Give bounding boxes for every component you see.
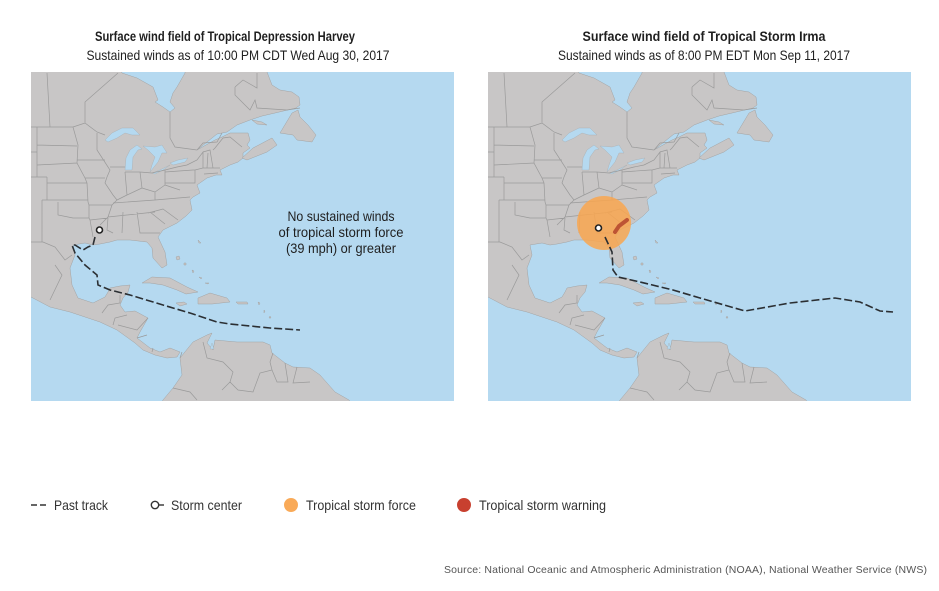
- Irma tropical storm warning: [615, 220, 627, 232]
- note: no sustained winds: [278, 208, 404, 256]
- legend: [31, 497, 606, 513]
- legend: past track: Past track: [54, 497, 109, 513]
- panel: Harvey map: [25, 60, 454, 405]
- title: Irma panel: [558, 28, 850, 63]
- icon: Irma storm center: [596, 225, 602, 231]
- title: Irma panel: Sustained winds as of 8:00 PM EDT Mon Sep 11, 2017: [558, 47, 850, 63]
- legend: tropical storm force: Tropical storm force: [306, 497, 416, 513]
- source note: Source: National Oceanic and Atmospheric Administration (NOAA), National Weather Service (NWS): [444, 564, 927, 576]
- Irma past track: [605, 237, 893, 312]
- Harvey past track: [72, 237, 300, 330]
- legend: past track: [31, 497, 109, 513]
- icon: Harvey storm center: [96, 227, 102, 233]
- legend: storm center: Storm center: [171, 497, 242, 513]
- title: Harvey panel: Surface wind field of Tropical Depression Harvey: [95, 28, 355, 44]
- title: Irma panel: Surface wind field of Tropical Storm Irma: [582, 28, 826, 44]
- title: Harvey panel: Sustained winds as of 10:00 PM CDT Wed Aug 30, 2017: [86, 47, 390, 63]
- note: no sustained winds: of tropical storm force: [278, 224, 404, 240]
- title: Harvey panel: [86, 28, 390, 63]
- Irma tropical storm force area: [577, 196, 631, 250]
- note: no sustained winds: (39 mph) or greater: [286, 240, 396, 256]
- note: no sustained winds: No sustained winds: [288, 208, 394, 224]
- panel: Irma map: [482, 60, 911, 405]
- legend: tropical storm warning: Tropical storm warning: [479, 497, 606, 513]
